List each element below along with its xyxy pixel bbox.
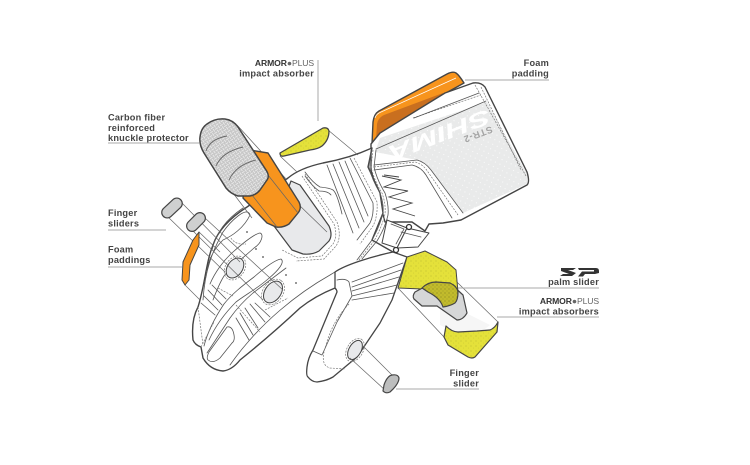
foam padding (cuff) — [372, 72, 464, 144]
SAP palm slider — [413, 283, 467, 320]
label: armor plus impact absorber: ARMOR●PLUS — [255, 58, 314, 68]
label: carbon fiber: reinforced — [108, 123, 155, 133]
label: finger slider — [396, 368, 479, 389]
gray palette — [274, 181, 331, 254]
label: finger slider: slider — [453, 378, 479, 388]
label: foam padding: Foam — [524, 58, 549, 68]
finger ovals — [223, 255, 247, 281]
label: foam paddings — [108, 244, 182, 267]
label: armor plus impact absorbers: ARMOR●PLUS — [540, 296, 599, 306]
finger slider disc 2 — [184, 210, 208, 234]
wrist strap — [382, 220, 429, 252]
speckle shadow — [440, 300, 490, 340]
orange knuckle foam — [243, 150, 300, 227]
finger slider disc 1 — [159, 196, 185, 220]
foam finger padding — [182, 232, 199, 285]
label: SAP palm slider: palm slider — [548, 277, 599, 287]
lower yellow absorber — [444, 322, 498, 358]
glove cuff — [371, 83, 528, 231]
label: armor plus impact absorber: impact absorber — [239, 68, 314, 78]
label: foam padding — [465, 58, 549, 80]
label: finger slider: Finger — [450, 368, 479, 378]
label: carbon fiber: Carbon fiber — [108, 112, 165, 122]
cuff logo: SHIMA — [384, 104, 493, 165]
thumb and palm — [307, 252, 407, 382]
palm absorber — [398, 251, 458, 292]
palm absorber overlap — [422, 282, 458, 307]
label: finger sliders — [108, 208, 166, 230]
wrist seam — [357, 150, 388, 260]
label: armor plus impact absorber — [239, 58, 318, 121]
hand back with gray knuckle palette — [193, 148, 393, 371]
label: carbon fiber — [108, 112, 199, 143]
label: SAP palm slider — [458, 268, 599, 288]
stripes — [327, 158, 373, 240]
label: foam padding: padding — [512, 68, 549, 78]
label: foam paddings: Foam — [108, 244, 133, 254]
label: finger sliders: sliders — [108, 218, 139, 228]
fingers — [203, 208, 250, 300]
carbon fiber knuckle protector — [200, 119, 268, 196]
cuff model name: STR-2 — [461, 123, 494, 144]
yellow impact absorber top — [280, 128, 329, 156]
explode lines — [168, 125, 498, 390]
label: foam paddings: paddings — [108, 255, 151, 265]
label: finger sliders: Finger — [108, 208, 138, 218]
thumb finger slider — [383, 375, 399, 393]
label: armor plus impact absorbers — [497, 296, 599, 317]
label: carbon fiber: knuckle protector — [108, 133, 189, 143]
label: armor plus impact absorbers: impact absorbers — [519, 306, 599, 316]
